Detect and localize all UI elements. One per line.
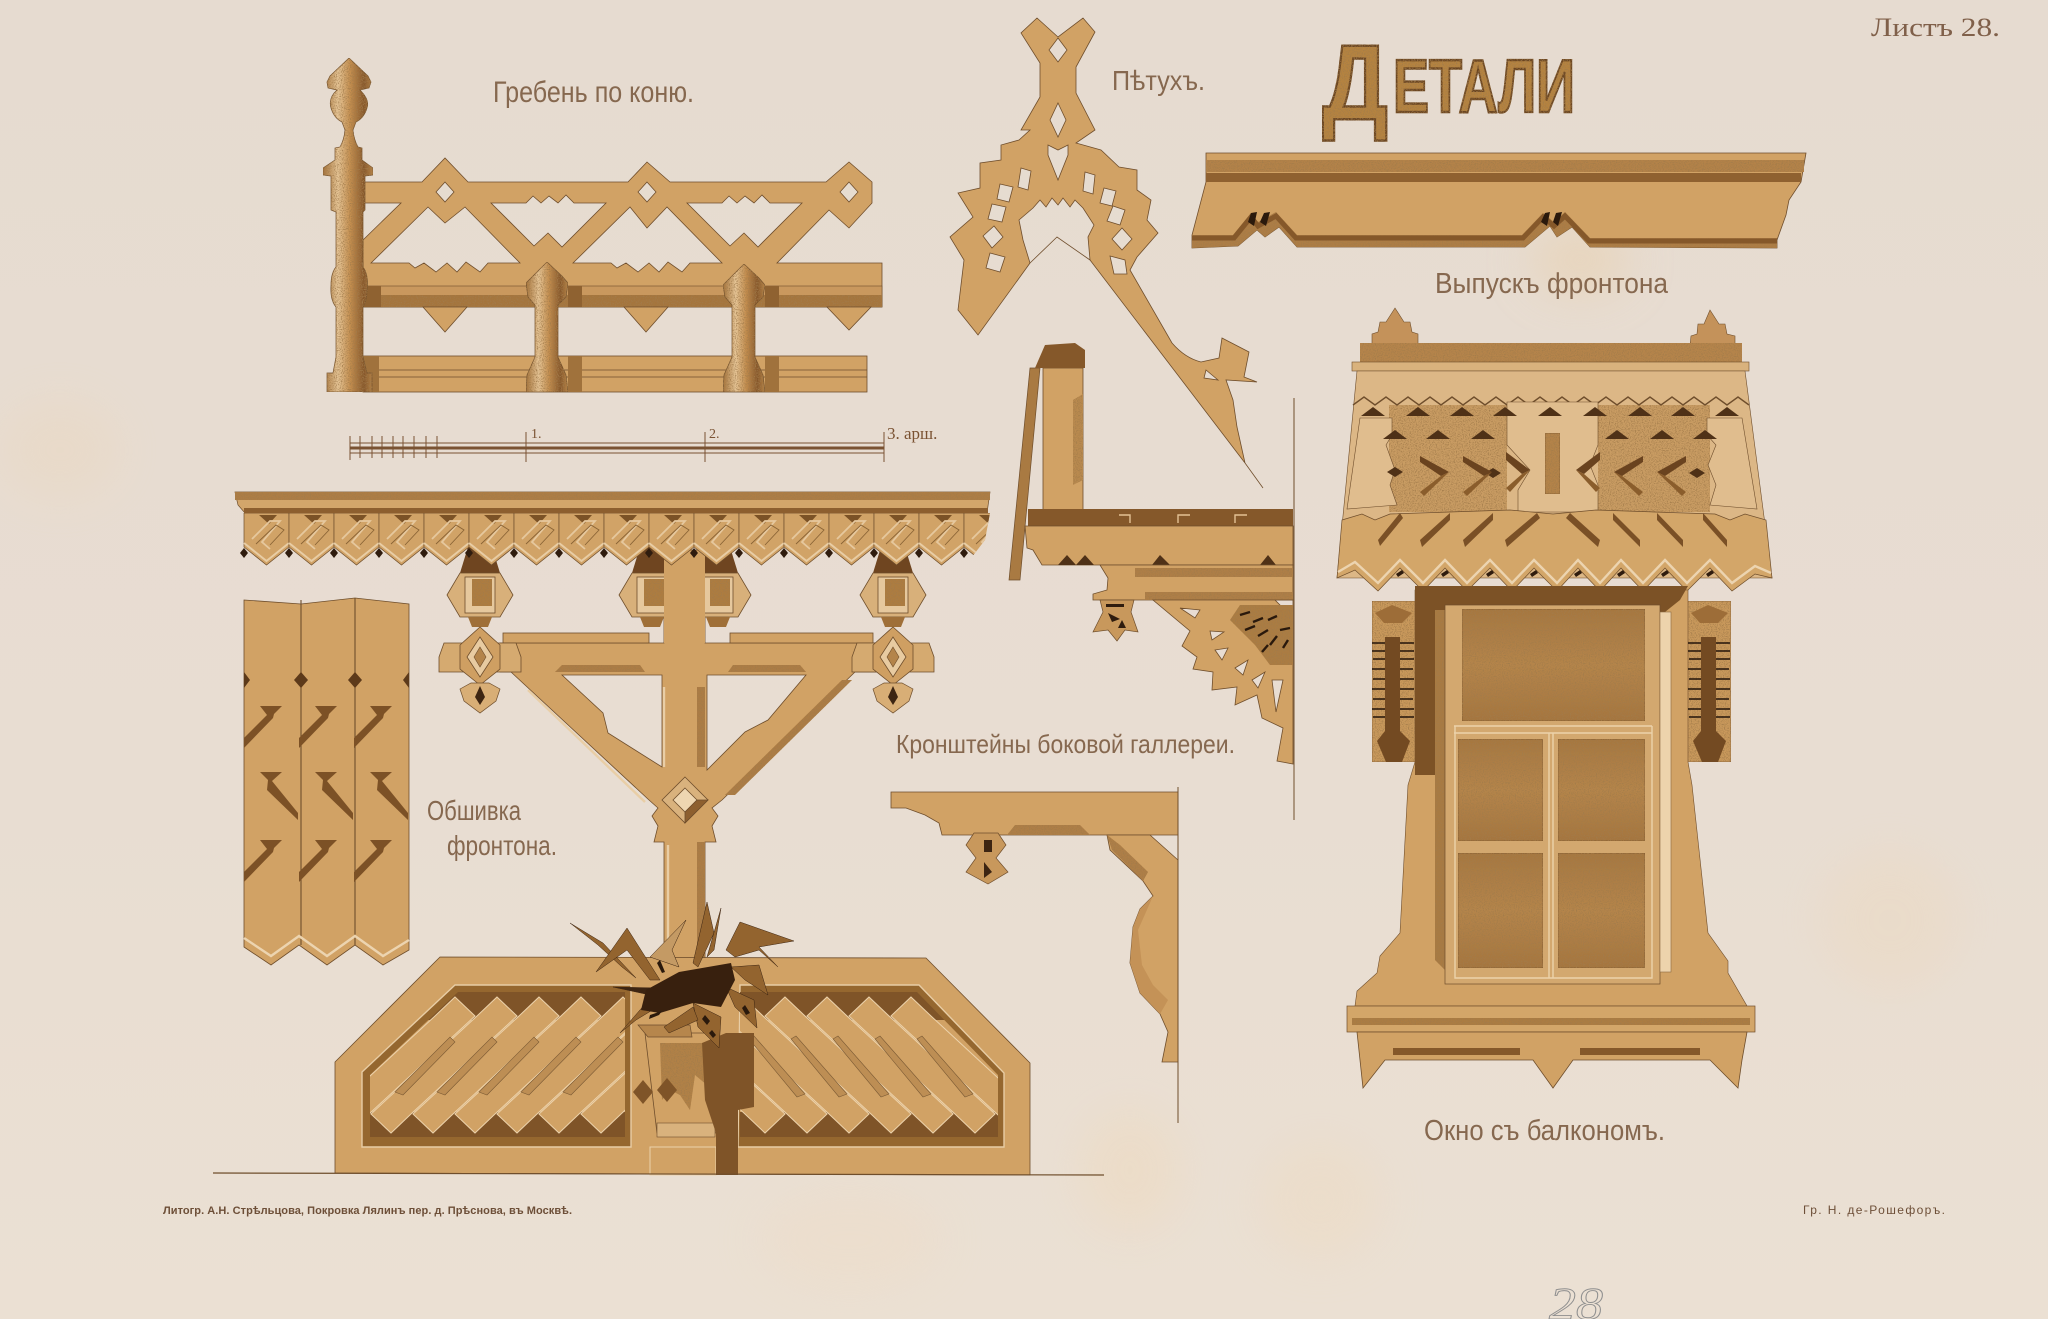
centre panel — [1507, 402, 1598, 512]
pedestal step — [657, 1123, 715, 1137]
pane bottom left — [1458, 853, 1543, 968]
roof body — [1337, 371, 1772, 578]
label: gable overhang: Выпускъ фронтона — [1435, 268, 1669, 300]
side panels — [1347, 418, 1757, 509]
knee — [1107, 835, 1178, 1062]
dark core — [641, 963, 735, 1013]
shadow under roof — [1415, 586, 1688, 780]
scale labels — [531, 424, 937, 443]
right pendant — [852, 547, 934, 713]
lower beam stipple — [1135, 568, 1293, 600]
skirt dark nicks — [1396, 570, 1714, 577]
right column — [1688, 601, 1731, 762]
ground line — [213, 1173, 1104, 1175]
frame shading — [555, 665, 852, 962]
bottom rail — [363, 356, 867, 392]
right panel — [740, 992, 998, 1137]
sill — [1347, 1006, 1755, 1032]
label: window with balcony: Окно съ балкономъ. — [1424, 1115, 1665, 1147]
left panel — [370, 992, 625, 1137]
roof finials — [1372, 308, 1735, 346]
label: gable boarding: фронтона. — [447, 830, 557, 861]
scale labels: 2. — [709, 427, 720, 442]
slanted strut — [1009, 368, 1040, 580]
cut-out shadows — [1361, 407, 1739, 547]
bracket assembly frame — [500, 550, 878, 965]
board seams — [301, 598, 355, 945]
fan bracket — [1153, 600, 1293, 764]
upper rails — [503, 633, 873, 643]
pane bottom right — [1558, 853, 1645, 968]
pane top right — [1558, 739, 1645, 841]
tooth frieze — [240, 513, 1009, 565]
beam — [1025, 526, 1293, 565]
lower edge highlight — [244, 936, 409, 956]
pedestal textured cloth — [660, 1043, 707, 1110]
central blocks — [619, 547, 685, 627]
large cornice with pendant brackets — [235, 492, 1009, 965]
upper glass — [1462, 609, 1645, 721]
fan stipple — [1230, 605, 1293, 665]
pot — [638, 1025, 692, 1037]
lower skirt — [1337, 510, 1772, 591]
fret marks — [1119, 515, 1247, 523]
label: side gallery brackets: Кронштейны боковой галлереи. — [896, 729, 1235, 759]
author imprint: Гр. Н. де-Рошефоръ. — [1803, 1203, 1945, 1217]
post cap — [1035, 343, 1085, 368]
zigzag top edge — [1353, 397, 1749, 405]
cast shadow — [702, 1033, 754, 1175]
left inner frame — [362, 985, 631, 1147]
left column — [1372, 601, 1415, 762]
window with balcony — [1337, 308, 1772, 1088]
main turned post — [323, 58, 373, 392]
scale labels: 3. арш. — [887, 424, 937, 443]
dark beam strip — [1028, 509, 1293, 526]
short post 2 — [723, 264, 765, 392]
seam diamonds — [244, 672, 409, 688]
label: gable boarding: Обшивка — [427, 795, 521, 826]
central block right — [685, 547, 751, 627]
beam over blocks — [664, 552, 705, 643]
knee stipple — [1107, 835, 1148, 881]
cut-outs row 2 — [260, 772, 408, 820]
scale labels: 1. — [531, 427, 542, 442]
sheet number: Листъ 28. — [1871, 13, 2000, 42]
post groove — [1073, 394, 1083, 485]
fan dark cuts — [1240, 612, 1290, 652]
short post 1 — [526, 262, 568, 392]
outer board — [335, 957, 1030, 1175]
pedestal base — [650, 1147, 716, 1175]
pane top left — [1458, 739, 1543, 841]
post — [1043, 368, 1083, 524]
vertical line — [1293, 398, 1295, 820]
skirt edge highlight — [1338, 560, 1771, 583]
vertical line — [1177, 787, 1179, 1123]
side diamonds — [633, 1078, 677, 1104]
leaves — [570, 902, 794, 1048]
hanging diamonds — [423, 307, 871, 332]
frame inner lines — [1448, 726, 1652, 984]
rooster gable ornament — [950, 18, 1263, 488]
central diamond — [662, 777, 708, 823]
side gallery bracket, lower — [891, 787, 1178, 1123]
lower beam — [1093, 565, 1293, 600]
middle rail shading — [363, 286, 882, 307]
body below roof — [1355, 590, 1747, 1006]
frame highlights — [528, 687, 668, 960]
cut-outs row 1 — [244, 706, 392, 748]
boards — [244, 598, 409, 965]
cut-outs row 3 — [244, 840, 392, 882]
label: gable boarding — [427, 795, 557, 861]
plant — [570, 902, 794, 1048]
right inner frame — [738, 985, 1004, 1147]
cornice top bands — [235, 492, 990, 513]
ridge comb drawing — [323, 58, 882, 392]
roof cornice — [1352, 343, 1749, 371]
window shadow left — [1435, 610, 1457, 975]
label: comb on ridge: Гребень по коню. — [493, 76, 694, 109]
label: cock: Пѣтухъ. — [1112, 65, 1205, 96]
gable boarding — [244, 598, 409, 965]
side gallery bracket, upper — [1009, 343, 1294, 820]
apron — [1357, 1032, 1747, 1088]
centre post — [1545, 433, 1560, 494]
scale bar — [350, 432, 884, 462]
title: Д — [1322, 22, 1388, 142]
title: ЕТАЛИ — [1393, 44, 1575, 128]
leaf flecks — [649, 960, 750, 1038]
balcony base panel with plant — [329, 902, 1037, 1175]
beam notches — [1058, 555, 1276, 565]
pendant — [966, 833, 1008, 884]
arm stipple — [1007, 825, 1090, 835]
side trim — [1660, 612, 1671, 972]
knee curve shade — [1130, 896, 1168, 1014]
pendant — [1093, 600, 1138, 641]
stippled fretwork — [1389, 405, 1507, 512]
lithographer imprint: Литогр. А.Н. Стрѣльцова, Покровка Лялинъ пер. д. Прѣснова, въ Москвѣ. — [163, 1205, 572, 1217]
pedestal column — [645, 1033, 716, 1133]
left pendant — [439, 547, 521, 713]
gable overhang cornice — [1192, 153, 1806, 248]
horizontal arm — [891, 792, 1178, 835]
stippled fretwork right — [1598, 405, 1710, 512]
title — [1322, 22, 1575, 142]
comb lattice — [363, 158, 882, 307]
window frame — [1445, 605, 1660, 984]
